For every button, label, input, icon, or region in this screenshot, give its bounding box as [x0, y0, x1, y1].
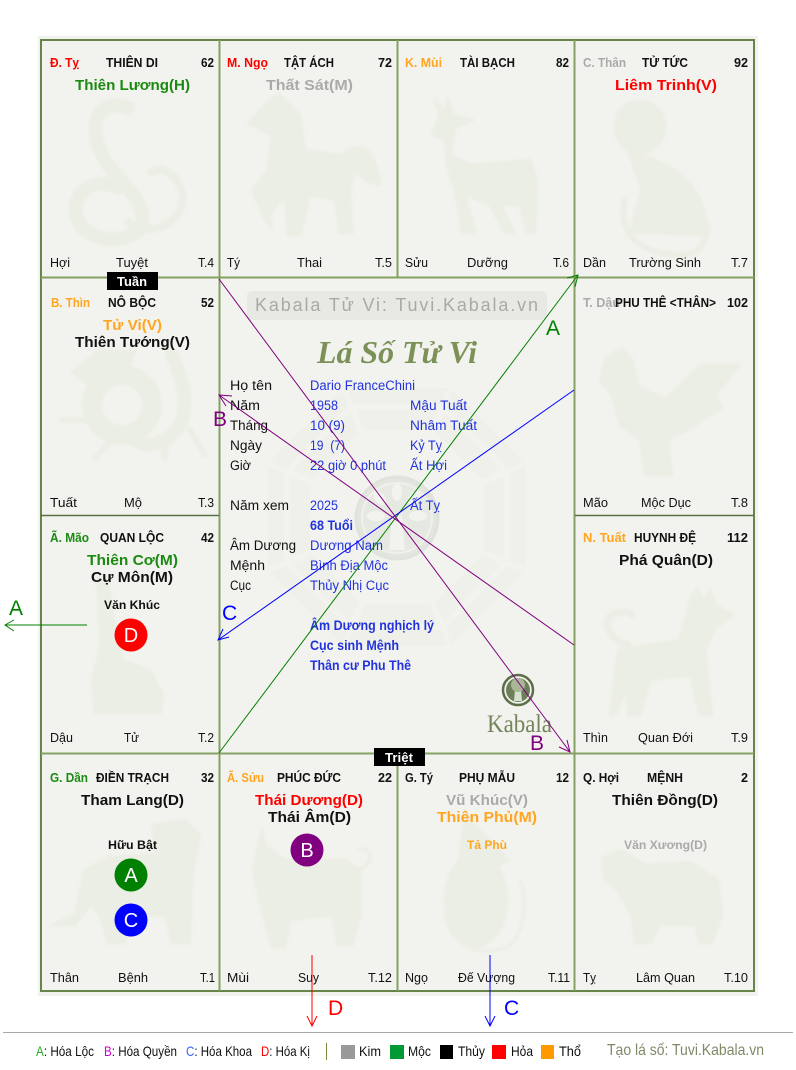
panel: Tử Tức palace: T.7 [731, 255, 748, 270]
panel: Tử Tức palace: C. Thân [583, 56, 626, 70]
panel: Mệnh palace: T.10 [724, 970, 748, 985]
Triệt marker: Triệt [385, 751, 414, 765]
panel: Tật Ách palace: TẬT ÁCH [284, 55, 334, 70]
panel: Mệnh palace: MỆNH [647, 770, 683, 785]
heading: Lá Số Tử Vi [316, 334, 477, 370]
birth details block: Ngày [230, 438, 262, 453]
panel: Tật Ách palace: 72 [378, 56, 392, 70]
birth details block: Năm xem [230, 498, 289, 513]
panel: Tài Bạch palace: 82 [556, 56, 569, 70]
panel: Điền Trạch palace: Tham Lang(D) [81, 792, 184, 809]
panel: Phúc Đức palace: 22 [378, 771, 392, 785]
badge A: A [124, 865, 138, 887]
panel: Nô Bộc palace: 52 [201, 296, 214, 310]
birth details block: Tháng [230, 418, 268, 433]
badge B [290, 834, 324, 866]
zodiac watermark: horse [248, 95, 380, 235]
panel: Tử Tức palace: Dần [583, 255, 606, 270]
panel: Mệnh palace [583, 770, 748, 985]
arrow label B: B [213, 408, 227, 431]
zodiac watermark: rat [445, 815, 524, 951]
arrow: A green diagonal [219, 275, 578, 753]
birth details block: 10 (9) [310, 418, 345, 433]
footer site credit: Tạo lá số: Tuvi.Kabala.vn [607, 1042, 764, 1059]
panel: Phụ Mẫu palace: PHỤ MẪU [459, 770, 515, 785]
legend: transformations: D: Hóa Kị [261, 1043, 310, 1059]
panel: Tật Ách palace: T.5 [375, 255, 392, 270]
panel: Nô Bộc palace: NÔ BỘC [108, 295, 156, 310]
panel: Quan Lộc palace: Tử [124, 730, 139, 745]
panel: Phụ Mẫu palace: 12 [556, 771, 569, 785]
panel: Thiên Di palace: Hợi [50, 255, 70, 270]
legend: transformations [36, 1043, 310, 1059]
arrow label D: D [328, 997, 343, 1020]
chart grid [41, 40, 754, 991]
birth details block: Âm Dương nghịch lý [310, 618, 434, 633]
arrow label C: C [222, 602, 237, 625]
footer divider [3, 1032, 793, 1033]
panel: Mệnh palace: Thiên Đồng(D) [612, 792, 718, 809]
panel: Tài Bạch palace: K. Mùi [405, 56, 442, 70]
legend: transformations: A: Hóa Lộc [36, 1043, 94, 1059]
panel: Nô Bộc palace: Tử Vi(V) [103, 317, 162, 334]
legend: elements: Kim [359, 1043, 381, 1059]
panel: Quan Lộc palace: Dậu [50, 730, 73, 745]
arrow label A: A [546, 317, 560, 340]
panel: Thiên Di palace: 62 [201, 56, 214, 70]
panel: Phu Thê palace: T. Dậu [583, 296, 620, 310]
panel: Phúc Đức palace: Thái Dương(D) [255, 792, 363, 809]
birth details block: Kỷ Tỵ [410, 438, 442, 453]
legend: elements [341, 1043, 581, 1059]
panel: Thiên Di palace: THIÊN DI [106, 55, 158, 70]
panel: Mệnh palace: 2 [741, 771, 748, 785]
panel: Tài Bạch palace: TÀI BẠCH [460, 55, 515, 70]
arrow label B lower: B [530, 732, 544, 755]
panel: Tài Bạch palace: Dưỡng [467, 255, 508, 270]
birth details block: Nhâm Tuất [410, 418, 477, 433]
birth details block: Mậu Tuất [410, 398, 467, 413]
badge D [114, 618, 148, 652]
panel: Quan Lộc palace: Văn Khúc [104, 598, 160, 612]
panel: Điền Trạch palace: Thân [50, 970, 79, 985]
zodiac watermark: snake [76, 106, 183, 239]
zodiac watermark: rabbit [92, 577, 163, 713]
panel: Quan Lộc palace [50, 530, 214, 745]
panel: Phu Thê palace: Mão [583, 495, 608, 510]
panel: Phúc Đức palace: T.12 [368, 970, 392, 985]
birth details block: Giờ [230, 458, 251, 473]
birth details block: 2025 [310, 498, 338, 513]
panel: Tài Bạch palace [405, 55, 569, 270]
panel: Phụ Mẫu palace: Ngọ [405, 970, 428, 985]
panel: Nô Bộc palace: Thiên Tướng(V) [75, 334, 190, 351]
panel: Phụ Mẫu palace: T.11 [548, 970, 570, 985]
panel: Phúc Đức palace: Mùi [227, 970, 249, 985]
panel: Huynh Đệ palace: Phá Quân(D) [619, 552, 713, 569]
birth details block: Dương Nam [310, 538, 383, 553]
panel: Thiên Di palace: Tuyệt [116, 255, 148, 270]
panel: Phúc Đức palace [227, 770, 392, 985]
badge D: D [124, 625, 138, 647]
birth details block: Cục sinh Mệnh [310, 638, 399, 653]
birth details block: Cục [230, 578, 251, 593]
panel: Tật Ách palace: Thất Sát(M) [266, 77, 353, 94]
panel: Mệnh palace: Văn Xương(D) [624, 838, 707, 852]
panel: Huynh Đệ palace: T.9 [731, 730, 748, 745]
arrow: D red outward [307, 955, 317, 1026]
zodiac watermark: tiger [52, 820, 200, 943]
Tuần marker [107, 272, 158, 290]
birth details block: 19 (7) [310, 438, 345, 453]
panel: Tật Ách palace [227, 55, 392, 270]
birth details block [230, 378, 477, 673]
panel: Tật Ách palace: M. Ngọ [227, 56, 268, 70]
panel: Phụ Mẫu palace: G. Tý [405, 771, 433, 785]
badge A [114, 858, 148, 892]
panel: Tử Tức palace: Liêm Trinh(V) [615, 77, 717, 94]
panel: Phúc Đức palace: Ã. Sửu [227, 770, 264, 785]
panel: Thiên Di palace: T.4 [198, 255, 214, 270]
panel: Huynh Đệ palace [583, 530, 748, 745]
panel: Quan Lộc palace: Thiên Cơ(M) [87, 552, 178, 569]
panel: Quan Lộc palace: QUAN LỘC [100, 530, 164, 545]
panel: Tài Bạch palace: Sửu [405, 255, 428, 270]
panel: Tử Tức palace [583, 55, 748, 270]
Kabala logo [487, 675, 552, 738]
zodiac watermark: dog [607, 588, 733, 715]
chart title banner [247, 291, 547, 320]
arrow: B purple to Năm [219, 395, 574, 645]
panel: Nô Bộc palace: T.3 [198, 495, 214, 510]
panel: Phu Thê palace [583, 295, 748, 510]
panel: Tử Tức palace: 92 [734, 56, 748, 70]
chart title banner: Kabala Tử Vi: Tuvi.Kabala.vn [255, 295, 538, 315]
Tuần marker: Tuần [117, 275, 147, 289]
panel: Quan Lộc palace: 42 [201, 531, 214, 545]
panel: Phu Thê palace: T.8 [731, 495, 748, 510]
birth details block: Bình Địa Mộc [310, 558, 388, 573]
panel: Mệnh palace: Lâm Quan [636, 970, 695, 985]
panel: Nô Bộc palace [50, 295, 214, 510]
legend: transformations: B: Hóa Quyền [104, 1043, 177, 1059]
panel: Phụ Mẫu palace: Tả Phù [467, 838, 507, 852]
panel: Nô Bộc palace: Tuất [50, 495, 77, 510]
panel: Quan Lộc palace: Cự Môn(M) [91, 569, 173, 586]
panel: Phúc Đức palace: Thái Âm(D) [268, 808, 351, 826]
panel: Điền Trạch palace: G. Dần [50, 771, 88, 785]
panel: Tử Tức palace: TỬ TỨC [642, 55, 688, 70]
birth details block: Mệnh [230, 558, 265, 573]
birth details block: 68 Tuổi [310, 518, 353, 533]
legend: elements: Thủy [458, 1043, 485, 1059]
birth details block: Thủy Nhị Cục [310, 578, 389, 593]
panel: Phụ Mẫu palace: Đế Vượng [458, 970, 515, 985]
panel: Thiên Di palace [50, 55, 214, 270]
birth details block: 1958 [310, 398, 338, 413]
legend: transformations: C: Hóa Khoa [186, 1043, 252, 1059]
panel: Điền Trạch palace: T.1 [200, 970, 215, 985]
panel: Tài Bạch palace: T.6 [553, 255, 569, 270]
panel: Phụ Mẫu palace [405, 770, 570, 985]
arrow: C blue outward [485, 955, 495, 1026]
panel: Mệnh palace: Q. Hợi [583, 771, 619, 785]
panel: Điền Trạch palace: 32 [201, 771, 214, 785]
panel: Quan Lộc palace: Ã. Mão [50, 530, 89, 545]
birth details block: Thân cư Phu Thê [310, 658, 411, 673]
birth details block: Dario FranceChini [310, 378, 415, 393]
arrow: A green outward [5, 620, 87, 631]
center watermark: bagua emblem [268, 388, 526, 646]
panel: Thiên Di palace: Thiên Lương(H) [75, 77, 190, 94]
zodiac watermark: monkey [615, 101, 707, 255]
birth details block: Âm Dương [230, 538, 296, 553]
zodiac watermark: dragon [62, 350, 205, 458]
birth details block: Năm [230, 398, 260, 413]
panel: Quan Lộc palace: T.2 [198, 730, 214, 745]
panel: Tử Tức palace: Trường Sinh [629, 255, 701, 270]
panel: Thiên Di palace: Đ. Tỵ [50, 56, 79, 70]
panel: Phu Thê palace: 102 [727, 296, 748, 310]
panel: Nô Bộc palace: B. Thìn [51, 296, 90, 310]
badge C [114, 904, 148, 936]
panel: Tật Ách palace: Thai [297, 255, 322, 270]
arrow label A left: A [9, 597, 23, 620]
badge C: C [124, 910, 138, 932]
panel: Điền Trạch palace: ĐIỀN TRẠCH [96, 770, 169, 785]
zodiac watermark: ox [253, 830, 370, 947]
panel: Phu Thê palace: PHU THÊ <THÂN> [615, 295, 716, 310]
birth details block: Họ tên [230, 378, 272, 393]
legend: elements: Thổ [559, 1043, 581, 1059]
zodiac watermark: pig [602, 850, 722, 943]
panel: Phu Thê palace: Mộc Dục [641, 495, 691, 510]
panel: Tật Ách palace: Tý [227, 255, 240, 270]
arrow: C blue diagonal [218, 390, 574, 640]
legend separator [326, 1043, 327, 1060]
legend: elements: Hỏa [511, 1043, 533, 1059]
panel: Phúc Đức palace: PHÚC ĐỨC [277, 770, 341, 785]
panel: Phụ Mẫu palace: Thiên Phủ(M) [437, 809, 537, 826]
panel: Nô Bộc palace: Mộ [124, 495, 142, 510]
birth details block: 22 giờ 0 phút [310, 458, 386, 473]
panel: Huynh Đệ palace: N. Tuất [583, 531, 627, 545]
panel: Mệnh palace: Tỵ [583, 970, 596, 985]
panel: Phụ Mẫu palace: Vũ Khúc(V) [446, 792, 528, 809]
panel: Huynh Đệ palace: Quan Đới [638, 730, 693, 745]
legend: elements: Mộc [408, 1043, 431, 1059]
birth details block: Ất Hợi [410, 458, 447, 473]
panel: Điền Trạch palace [50, 770, 215, 985]
panel: Huynh Đệ palace: Thìn [583, 730, 608, 745]
arrow label C lower: C [504, 997, 519, 1020]
Kabala logo: Kabala [487, 711, 552, 738]
panel: Điền Trạch palace: Bệnh [118, 970, 148, 985]
panel: Phúc Đức palace: Suy [298, 970, 319, 985]
panel: Huynh Đệ palace: HUYNH ĐỆ [634, 530, 696, 545]
zodiac watermark: goat [432, 98, 537, 233]
birth details block: Ất Tỵ [410, 498, 440, 513]
arrow: B purple diagonal [219, 279, 570, 752]
badge B: B [300, 840, 314, 862]
panel: Điền Trạch palace: Hữu Bật [108, 838, 157, 852]
panel: Huynh Đệ palace: 112 [727, 531, 748, 545]
Triệt marker [374, 748, 425, 766]
zodiac watermark: rooster [600, 348, 740, 475]
